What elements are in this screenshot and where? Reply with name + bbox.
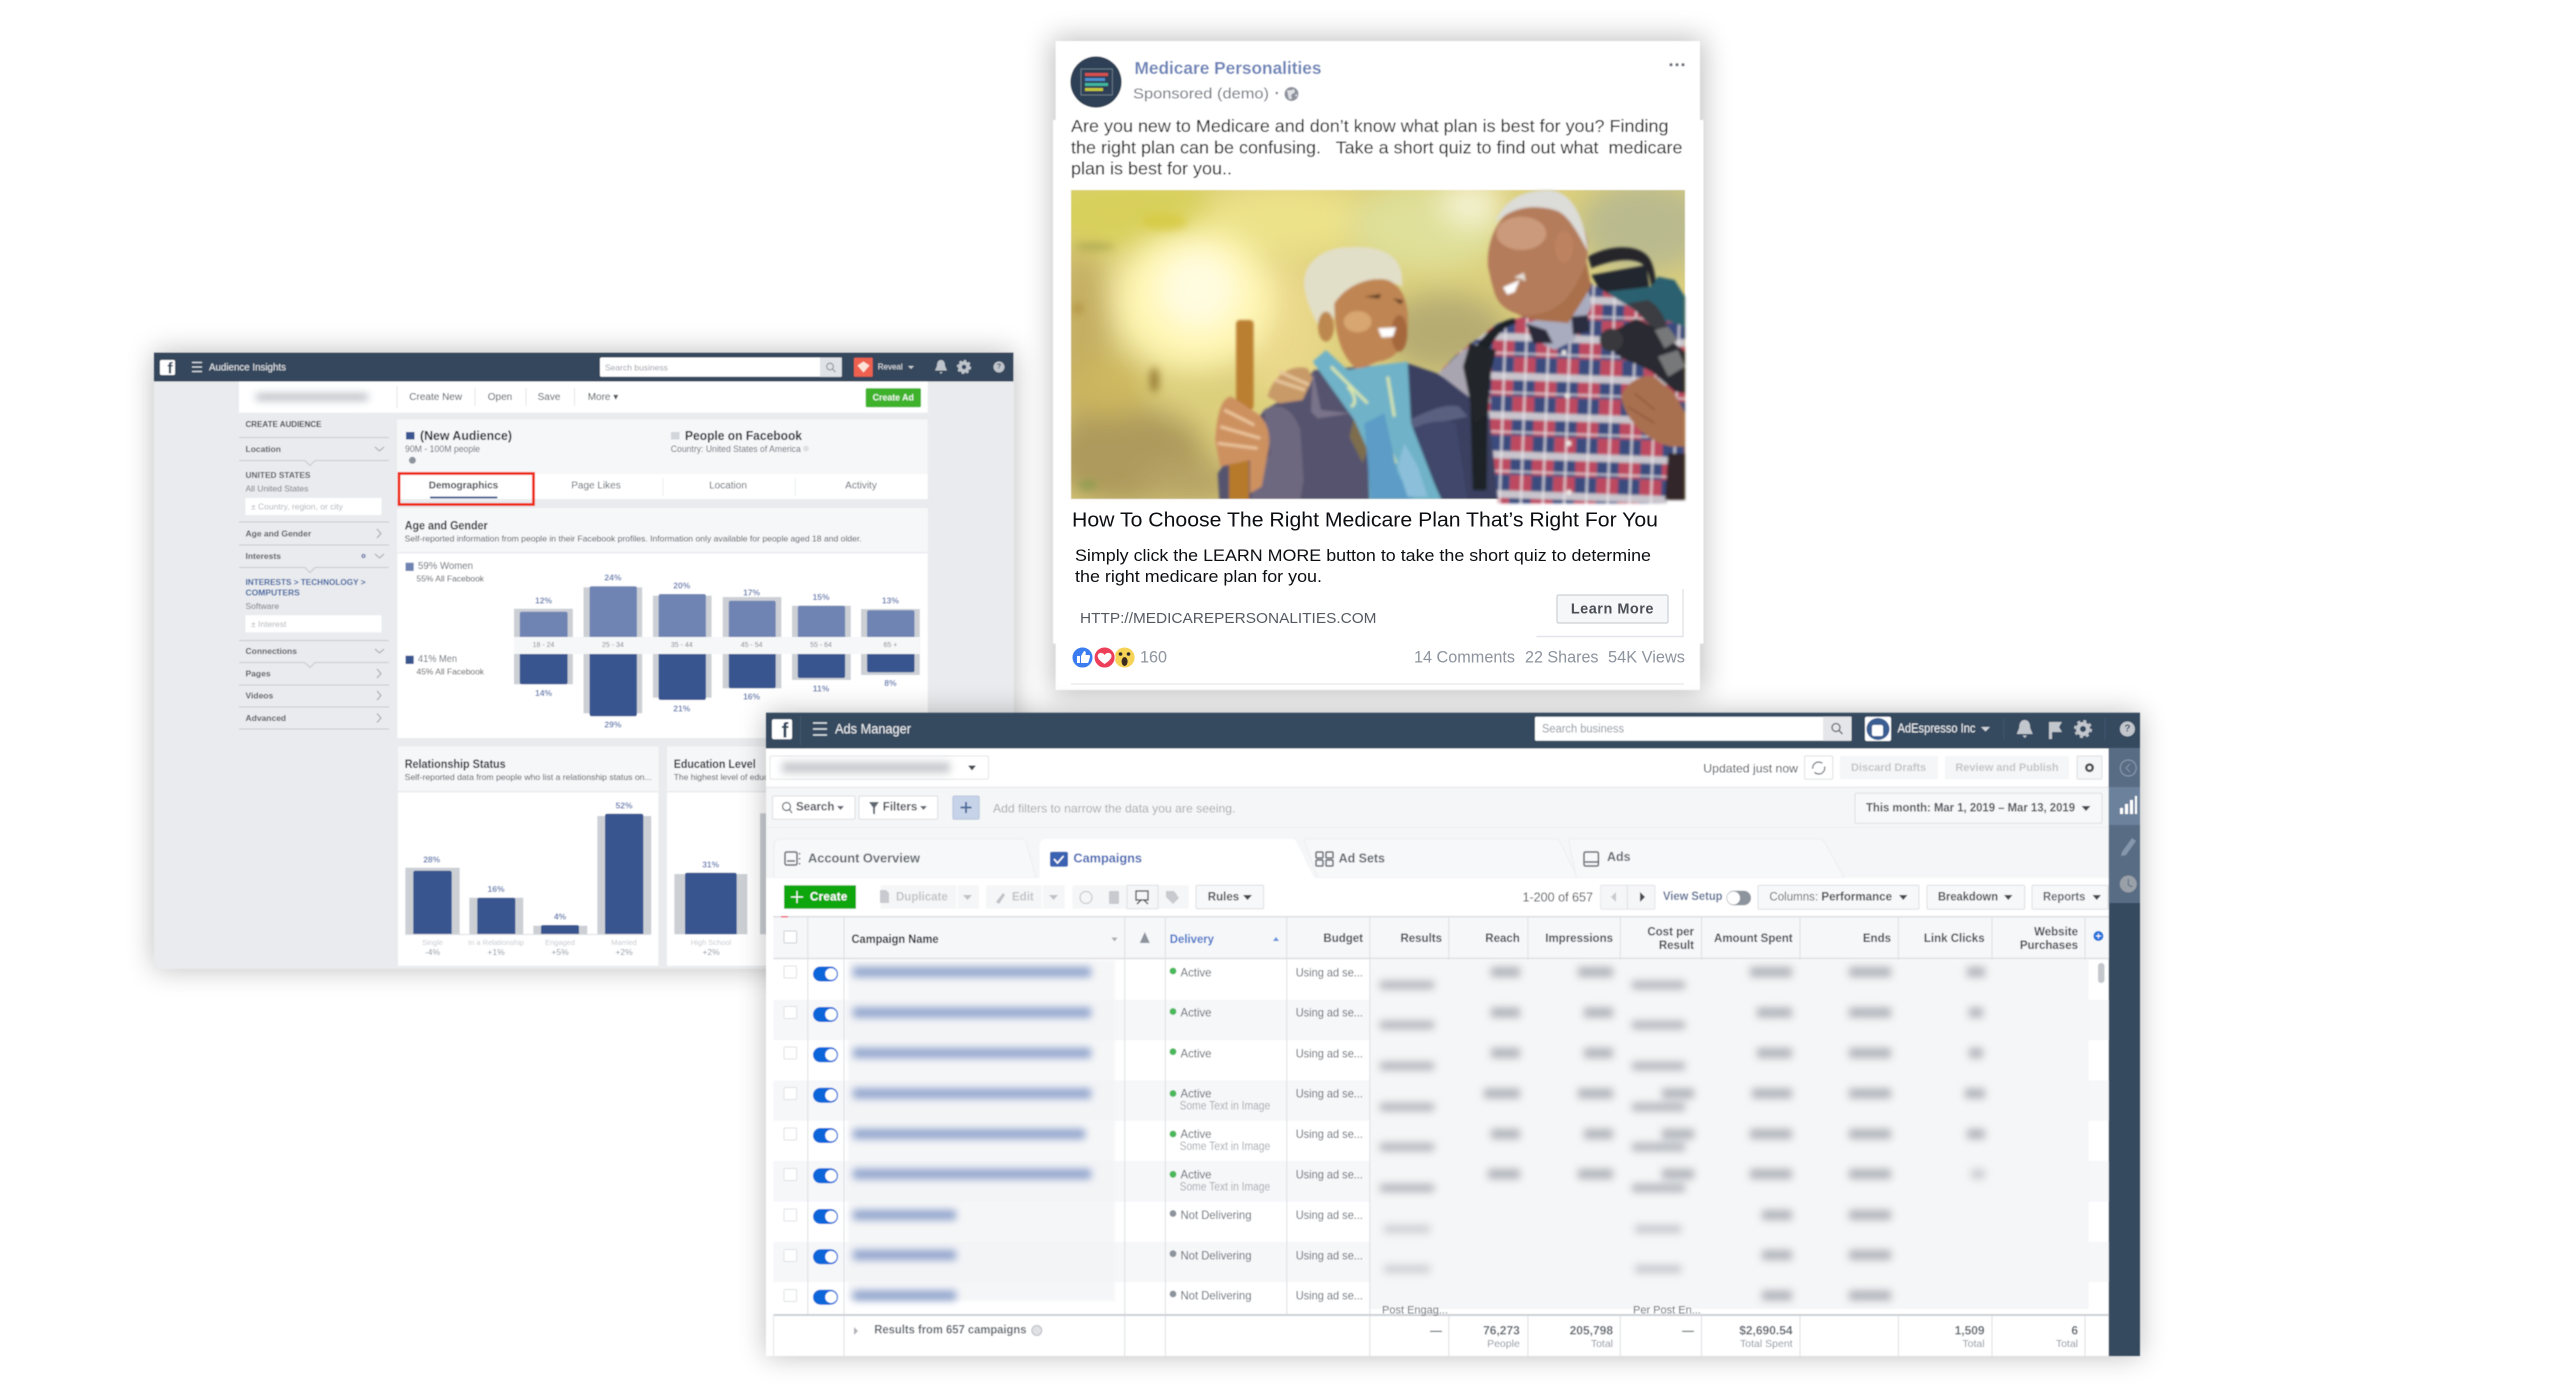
- panel: age and gender: Self-reported information from people in their Facebook profiles. Information only available for people aged 18 and older.: [405, 533, 862, 543]
- relationship bar chart: 4%: [554, 912, 567, 922]
- photo: man with camera and plaid shirt: [1438, 190, 1685, 503]
- age and gender bar chart: 35 - 44: [671, 642, 693, 649]
- table footer totals: —: [1682, 1323, 1694, 1337]
- age and gender bar chart: 8%: [884, 678, 897, 688]
- campaigns table header: Reach: [1485, 933, 1520, 945]
- audience sidebar: create audience: COMPUTERS: [246, 588, 300, 598]
- campaigns table header: Delivery: [1170, 932, 1214, 946]
- action toolbar: Columns: Performance: [1769, 891, 1892, 903]
- panel: Audience Insights screenshot: [154, 352, 1014, 969]
- campaigns table header: Results: [1400, 933, 1442, 945]
- age and gender bar chart: 20%: [673, 580, 691, 590]
- age gender legend: 41% Men: [418, 654, 457, 665]
- learn more button: Learn More: [1571, 601, 1654, 617]
- panel: education level: High School: [691, 938, 732, 947]
- create button: Create: [810, 891, 848, 903]
- age gender legend: 45% All Facebook: [416, 667, 485, 677]
- campaigns table header: Ends: [1863, 933, 1891, 945]
- audience sidebar: create audience: ± Interest: [251, 619, 287, 629]
- table footer totals: [773, 1305, 2109, 1356]
- photo: woman with walking stick: [1215, 247, 1501, 500]
- ad description: Simply click the LEARN MORE button to take the short quiz to determine: [1075, 546, 1651, 565]
- ads manager top bar: Search business: [1542, 723, 1624, 735]
- age and gender bar chart: 65 +: [883, 642, 897, 649]
- audience tabs: Location: [709, 480, 747, 492]
- reaction icons and count: 160: [1140, 648, 1167, 666]
- table footer totals: Total: [2056, 1338, 2078, 1350]
- audience header card: (New Audience): [420, 428, 512, 443]
- table footer totals: Total: [1591, 1338, 1613, 1350]
- audience sidebar: create audience: INTERESTS > TECHNOLOGY >: [246, 577, 366, 587]
- relationship bar chart: -4%: [425, 947, 440, 957]
- delivery status column: Some Text in Image: [1180, 1101, 1270, 1113]
- panel: relationship status: [398, 747, 658, 966]
- relationship bar chart: 28%: [423, 854, 441, 864]
- age and gender bar chart: 16%: [743, 692, 761, 702]
- age gender legend: 59% Women: [418, 561, 473, 572]
- blurred campaign names: [848, 960, 1115, 1301]
- age and gender bar chart: 15%: [812, 592, 830, 602]
- audience tabs: [397, 474, 928, 499]
- delivery status column: Not Delivering: [1180, 1248, 1252, 1262]
- table footer totals: People: [1487, 1338, 1520, 1350]
- budget column: Using ad se...: [1296, 1289, 1363, 1303]
- ad avatar: [1070, 56, 1122, 108]
- age and gender bar chart: 17%: [743, 587, 761, 597]
- panel: relationship status: Self-reported data from people who list a relationship status on...: [405, 772, 652, 782]
- ad engagement stats: 22 Shares: [1525, 648, 1598, 666]
- relationship bar chart: +2%: [615, 947, 633, 957]
- photo background foliage, right: [1352, 190, 1686, 374]
- audience sidebar: create audience: All United States: [246, 484, 308, 494]
- panel: education level: 31%: [702, 859, 720, 869]
- age and gender bar chart: 55 - 64: [810, 642, 832, 649]
- age and gender bar chart: 12%: [535, 596, 552, 606]
- filter row: Search: [796, 802, 834, 814]
- audience toolbar: Save: [538, 392, 561, 403]
- action toolbar: View Setup: [1663, 891, 1722, 903]
- audience toolbar: Open: [488, 392, 512, 403]
- delivery status column: Active: [1180, 1167, 1212, 1181]
- campaigns table header: Budget: [1323, 933, 1363, 945]
- audience sidebar: create audience: Location: [246, 444, 281, 454]
- audience toolbar: [239, 382, 928, 413]
- delivery status column: Active: [1180, 1087, 1212, 1101]
- tab: ads: Ads: [1607, 850, 1631, 864]
- budget column: Using ad se...: [1296, 1046, 1363, 1060]
- audience sidebar: create audience: Videos: [246, 691, 273, 701]
- audience sidebar: create audience: [239, 419, 389, 729]
- audience sidebar: create audience: Interests: [246, 551, 281, 561]
- budget column: Using ad se...: [1296, 1006, 1363, 1020]
- action toolbar: Duplicate: [896, 891, 948, 903]
- action toolbar: Reports: [2043, 891, 2085, 903]
- budget column: Using ad se...: [1296, 1087, 1363, 1101]
- action toolbar: Edit: [1012, 891, 1034, 903]
- account row: Updated just now: [1703, 761, 1798, 775]
- relationship bar chart: In a Relationship: [468, 938, 524, 947]
- campaigns table header: Website: [2034, 926, 2078, 938]
- campaigns table header: Purchases: [2020, 940, 2078, 952]
- audience sidebar: create audience: Advanced: [246, 713, 286, 723]
- ad description: [1075, 546, 1651, 586]
- ad display URL: HTTP://MEDICAREPERSONALITIES.COM: [1080, 610, 1376, 627]
- action toolbar: Breakdown: [1938, 891, 1998, 903]
- audience sidebar: create audience: Connections: [246, 646, 297, 656]
- audience toolbar: Create New: [409, 392, 463, 403]
- photo background foliage, left: [1070, 190, 1352, 500]
- relationship bar chart: +5%: [551, 947, 569, 957]
- ads manager right rail: [2109, 748, 2140, 1356]
- relationship bar chart: 52%: [615, 800, 633, 810]
- filter row: Filters: [883, 802, 917, 814]
- campaigns table header: Impressions: [1545, 933, 1613, 945]
- campaigns table header: Campaign Name: [852, 932, 939, 946]
- delivery status column: Active: [1180, 1006, 1212, 1020]
- relationship bar chart: [405, 800, 651, 957]
- table footer totals: $2,690.54: [1739, 1323, 1793, 1337]
- photo background leaf details: [1074, 213, 1188, 490]
- relationship bar chart: Single: [422, 938, 443, 947]
- sponsored line: Sponsored (demo): [1133, 86, 1269, 102]
- ads manager top bar: Ads Manager: [835, 722, 911, 736]
- ad body copy: plan is best for you..: [1071, 158, 1232, 178]
- action toolbar: Rules: [1208, 891, 1239, 903]
- audience toolbar: Create Ad: [873, 393, 914, 403]
- ad engagement stats: [1414, 648, 1685, 666]
- blurred metric columns: [1370, 960, 2089, 1309]
- table footer totals: 6: [2071, 1323, 2078, 1337]
- table footer totals: Total: [1962, 1338, 1985, 1350]
- audience header card: People on Facebook: [685, 428, 803, 443]
- table footer totals: Results from 657 campaigns: [874, 1324, 1026, 1336]
- filter row: [766, 787, 2109, 828]
- ads manager top bar: f: [782, 720, 790, 742]
- panel: education level: Education Level: [674, 757, 756, 771]
- delivery status column: Some Text in Image: [1180, 1181, 1270, 1193]
- budget column: Using ad se...: [1296, 1248, 1363, 1262]
- ad engagement stats: 14 Comments: [1414, 648, 1515, 666]
- relationship bar chart: 16%: [487, 884, 505, 894]
- tab: campaigns active: Campaigns: [1073, 852, 1142, 866]
- campaigns table header: Result: [1659, 940, 1694, 952]
- ad headline: How To Choose The Right Medicare Plan That’s Right For You: [1072, 508, 1658, 532]
- panel: education level: The highest level of education...: [674, 772, 794, 782]
- learn more button: [1536, 589, 1683, 636]
- action toolbar: 1-200 of 657: [1522, 891, 1593, 905]
- age and gender bar chart: 25 - 34: [602, 642, 624, 649]
- campaigns table header: Link Clicks: [1924, 933, 1985, 945]
- panel: education level: +2%: [702, 947, 720, 957]
- row toggles and checkboxes: [784, 966, 838, 1305]
- filter row: Add filters to narrow the data you are seeing.: [993, 801, 1235, 815]
- ad body copy: the right plan can be confusing. Take a short quiz to find out what medicare: [1071, 138, 1682, 158]
- campaigns table header: [773, 918, 2109, 958]
- table footer totals: Post Engag...: [1382, 1305, 1448, 1317]
- age and gender bar chart: 11%: [813, 683, 830, 693]
- ad photo: senior couple hiking: [1070, 189, 1686, 500]
- audience sidebar: create audience: CREATE AUDIENCE: [246, 419, 322, 429]
- account row: [770, 756, 2102, 779]
- table footer totals: 76,273: [1483, 1323, 1520, 1337]
- account row: Review and Publish: [1955, 762, 2059, 774]
- age and gender bar chart: 29%: [604, 720, 622, 730]
- delivery status column: Not Delivering: [1180, 1208, 1252, 1222]
- ad body copy: Are you new to Medicare and don’t know what plan is best for you? Finding: [1071, 116, 1668, 136]
- tab: ad sets: [1304, 839, 1578, 878]
- audience tabs: Activity: [845, 480, 877, 492]
- audience sidebar: create audience: Age and Gender: [246, 529, 312, 539]
- audience insights top bar: [154, 352, 1014, 382]
- table footer totals: Total Spent: [1740, 1338, 1793, 1350]
- audience insights top bar: Audience Insights: [209, 361, 286, 373]
- age and gender bar chart: 21%: [673, 703, 691, 713]
- table footer totals: —: [1430, 1323, 1442, 1337]
- filter row: This month: Mar 1, 2019 – Mar 13, 2019: [1866, 802, 2075, 814]
- tab: account overview: Account Overview: [808, 852, 920, 866]
- delivery status column: Active: [1180, 1127, 1212, 1141]
- relationship bar chart: Engaged: [545, 938, 575, 947]
- panel: relationship status: Relationship Status: [405, 757, 506, 771]
- table scrollbar: [2098, 963, 2104, 983]
- panel: Facebook sponsored ad card: [1044, 38, 1711, 694]
- audience toolbar: More ▾: [588, 392, 618, 403]
- campaigns table header: Amount Spent: [1714, 933, 1793, 945]
- budget column: Using ad se...: [1296, 1208, 1363, 1222]
- panel: age and gender: [397, 508, 928, 738]
- tab: ads: [1568, 839, 1844, 878]
- campaign level tabs: [766, 828, 2109, 878]
- ads manager top bar: ?: [2124, 724, 2130, 734]
- table footer totals: 205,798: [1570, 1323, 1613, 1337]
- ad page name: Medicare Personalities: [1134, 58, 1322, 78]
- audience sidebar: create audience: Pages: [246, 669, 271, 679]
- audience header card: Country: United States of America: [671, 444, 801, 454]
- ads manager top bar: AdEspresso Inc: [1898, 722, 1976, 736]
- age and gender bar chart: 24%: [604, 573, 622, 583]
- audience insights top bar: f: [167, 360, 173, 378]
- budget column: [1296, 965, 1363, 1303]
- delivery status column: Active: [1180, 1046, 1212, 1060]
- audience insights top bar: ?: [997, 364, 1001, 370]
- age gender legend: 55% All Facebook: [416, 574, 485, 584]
- delivery status column: [1170, 965, 1270, 1303]
- panel: education level: [667, 747, 928, 966]
- audience header card: [397, 420, 928, 474]
- campaign rows: [773, 917, 2109, 1356]
- table footer totals: Per Post En...: [1633, 1305, 1701, 1317]
- delivery status column: Active: [1180, 965, 1212, 979]
- action toolbar: [766, 878, 2109, 918]
- tab: ad sets: Ad Sets: [1339, 852, 1385, 866]
- tab: account overview: [774, 839, 1036, 878]
- delivery status column: Some Text in Image: [1180, 1141, 1270, 1153]
- ad engagement stats: 54K Views: [1608, 648, 1685, 666]
- audience tabs: Page Likes: [571, 480, 621, 492]
- panel: Ads Manager screenshot: [766, 713, 2140, 1356]
- ads manager top bar: [766, 713, 2140, 748]
- audience sidebar: create audience: ± Country, region, or city: [251, 502, 344, 512]
- campaigns table header: Cost per: [1647, 926, 1695, 938]
- age and gender bar chart: 14%: [535, 688, 552, 698]
- reaction icons and count: [1072, 647, 1167, 668]
- delivery status column: Not Delivering: [1180, 1289, 1252, 1303]
- tab: campaigns active: [1040, 839, 1314, 878]
- table column lines: [808, 917, 2085, 1356]
- age and gender bar chart: 18 - 24: [533, 642, 555, 649]
- age gender legend: [406, 561, 485, 677]
- account row: Discard Drafts: [1851, 762, 1926, 774]
- relationship bar chart: +1%: [487, 947, 505, 957]
- ad description: the right medicare plan for you.: [1075, 567, 1322, 586]
- audience sidebar: create audience: Software: [246, 601, 279, 611]
- relationship bar chart: Married: [611, 938, 637, 947]
- age and gender bar chart: 13%: [882, 596, 899, 606]
- age and gender bar chart: 45 - 54: [741, 642, 763, 649]
- audience sidebar: create audience: UNITED STATES: [246, 470, 311, 480]
- more options dots: [1669, 63, 1685, 66]
- age and gender bar chart: [514, 573, 920, 730]
- budget column: Using ad se...: [1296, 965, 1363, 979]
- panel: age and gender: Age and Gender: [405, 518, 488, 532]
- audience insights top bar: Search business: [605, 362, 668, 372]
- audience tabs: Demographics: [429, 480, 499, 492]
- create button: [784, 885, 856, 909]
- budget column: Using ad se...: [1296, 1167, 1363, 1181]
- audience header card: 90M - 100M people: [405, 444, 480, 454]
- budget column: Using ad se...: [1296, 1127, 1363, 1141]
- table footer totals: 1,509: [1955, 1323, 1985, 1337]
- ad body copy: [1071, 116, 1682, 178]
- audience insights top bar: Reveal: [878, 361, 903, 371]
- red highlight box around Demographics tab: [399, 474, 534, 504]
